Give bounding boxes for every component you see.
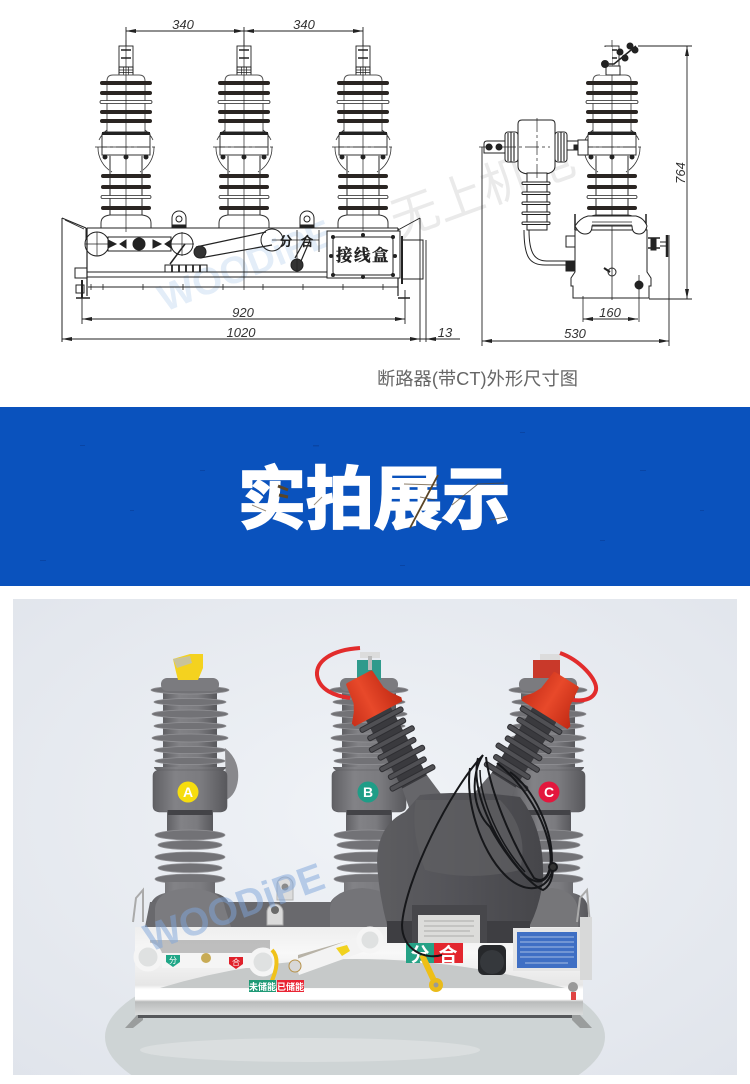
side view dimension drawing [479, 40, 692, 346]
side pole [581, 40, 643, 232]
badge C: C [544, 784, 554, 800]
red wire B [317, 648, 360, 698]
grounding bolt [568, 982, 578, 1000]
chrome housing [135, 927, 583, 1015]
drawing caption: 断路器(带CT)外形尺寸图 [377, 369, 578, 389]
photo background [13, 599, 737, 1075]
pole A drawing [95, 40, 157, 232]
second link [289, 929, 381, 975]
product photo panel [0, 599, 750, 1084]
base box [566, 214, 667, 322]
pole C drawing [332, 40, 394, 232]
energy storage stickers [249, 980, 304, 992]
dimension 340 right: 340 [293, 17, 316, 32]
phase A pole [150, 654, 238, 929]
phase C pole [508, 654, 588, 929]
black cable [402, 755, 557, 956]
opening and closing link [136, 945, 275, 974]
dimension 160: 160 [599, 305, 622, 320]
red wire C [560, 653, 596, 700]
charged label: 已储能 [277, 981, 304, 992]
badge B: B [363, 784, 373, 800]
open label: 分 [279, 234, 293, 249]
hook lug [267, 904, 283, 925]
not charged label: 未储能 [249, 981, 276, 992]
pole bases over plate [155, 888, 232, 930]
handle left [133, 890, 143, 922]
side dimension lines [482, 46, 692, 346]
dimension 340 left: 340 [172, 17, 195, 32]
hook lug back [277, 877, 293, 900]
badge B [358, 782, 378, 802]
dimension 530: 530 [564, 326, 587, 341]
junction box label: 接线盒 [336, 245, 390, 265]
back mechanism shadow [150, 940, 270, 958]
diagram watermark [153, 133, 582, 320]
dimension 920: 920 [232, 305, 255, 320]
badge C [538, 782, 560, 802]
CT bushing right [466, 664, 590, 817]
phase B pole [329, 652, 409, 929]
dimension 1020: 1020 [227, 325, 256, 340]
lug left [172, 211, 186, 228]
nameplate housing [387, 905, 530, 943]
current transformer [479, 118, 588, 271]
white strip below photo [0, 1075, 750, 1084]
mechanism linkage [85, 229, 319, 272]
heading band [0, 407, 750, 586]
junction box [327, 231, 400, 279]
top terminal [600, 43, 638, 75]
dimension 13: 13 [438, 325, 453, 340]
yellow operating arm [422, 955, 443, 992]
lug right [300, 211, 314, 228]
open close indicator [406, 943, 463, 966]
mounting frame [62, 218, 426, 342]
open close indicator: 分 [410, 944, 430, 966]
open sticker: 分 [169, 956, 177, 965]
open close indicator: 合 [438, 944, 458, 966]
frame feet [125, 1015, 592, 1028]
red terminal [533, 654, 560, 678]
base disc [105, 952, 605, 1084]
front view dimension drawing [62, 17, 460, 342]
current transformer body [377, 793, 543, 925]
badge A [178, 782, 198, 802]
dimension lines [62, 27, 460, 341]
green terminal [357, 652, 381, 680]
yellow hook [270, 950, 277, 985]
grey mounting plate [145, 902, 585, 927]
handle right [577, 890, 590, 925]
pole B drawing [213, 40, 275, 232]
close sticker: 合 [232, 957, 240, 967]
diagram watermark: WOODiPE [153, 213, 339, 320]
dimension 764: 764 [673, 162, 688, 184]
badge A: A [183, 784, 193, 800]
black connector [478, 945, 506, 975]
heading title: 实拍展示 [238, 444, 510, 543]
side plate [580, 917, 592, 980]
diagram watermark: 无上机电 [384, 133, 582, 248]
close label: 合 [300, 234, 314, 249]
title scratches [252, 475, 506, 528]
CT bushing left [334, 664, 452, 818]
blue specification plate [513, 928, 580, 971]
photo watermark: WOODiPE [138, 856, 330, 960]
yellow terminal cover [173, 654, 203, 680]
